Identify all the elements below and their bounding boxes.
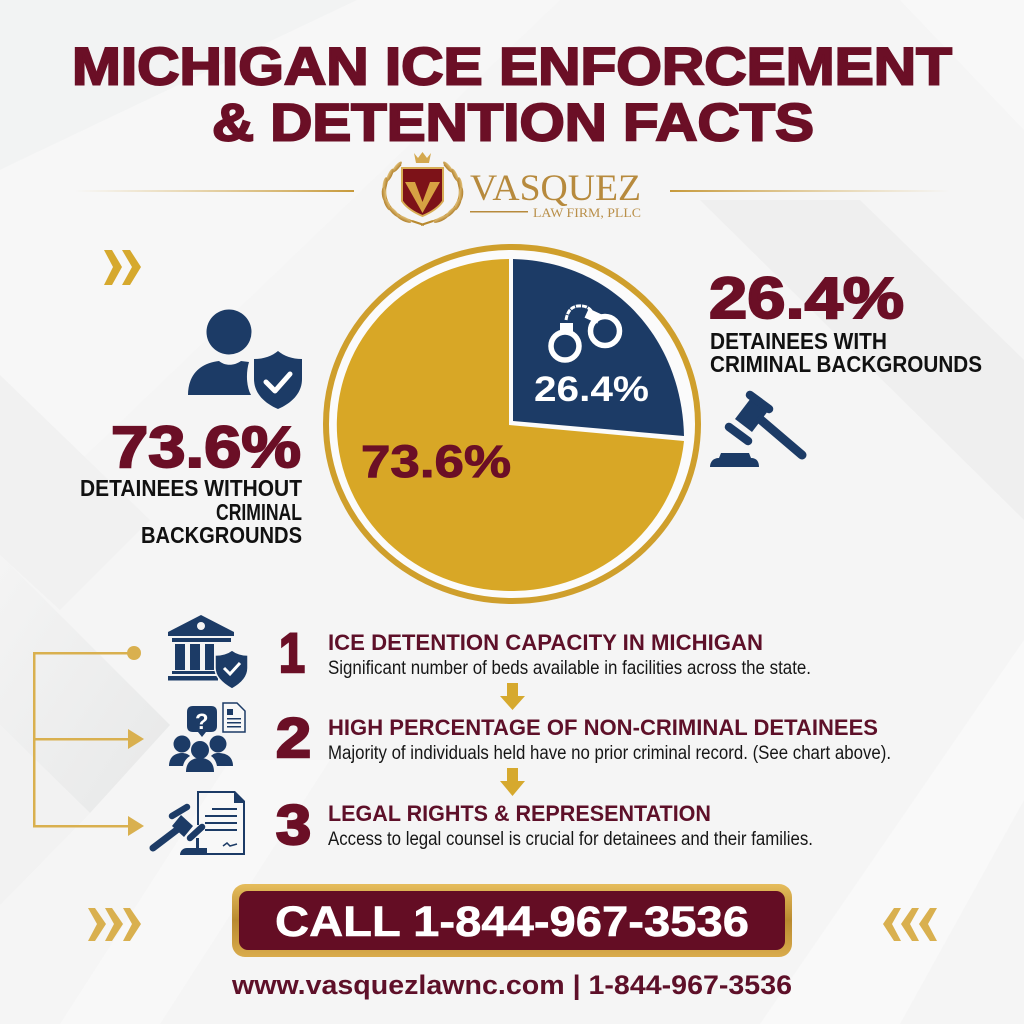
step 2 text: [328, 715, 891, 764]
pie outer ring: [326, 247, 698, 601]
logo: Vasquez Law Firm: LAW FIRM, PLLC: [533, 205, 641, 220]
stat: 73.6% without criminal backgrounds: CRIMINAL: [216, 499, 302, 525]
stat: 26.4% with criminal backgrounds: CRIMINAL BACKGROUNDS: [710, 351, 982, 377]
chevrons bottom left: [88, 908, 141, 941]
pie chart: [326, 247, 698, 601]
chevrons bottom right: [883, 908, 937, 941]
icon: courthouse with shield: [168, 615, 248, 689]
icon: group with question and document: ?: [195, 709, 208, 734]
icon: gavel and document: [153, 791, 245, 855]
step 2 text: Majority of individuals held have no prior criminal record. (See chart above).: [328, 743, 891, 764]
step numbers: 1: [279, 621, 305, 684]
pie slice 73.6%: [337, 259, 684, 591]
arrow: step 2 to 3: [500, 768, 525, 796]
stat: 73.6% without criminal backgrounds: DETAINEES WITHOUT: [80, 475, 302, 501]
stat: 73.6% without criminal backgrounds: BACKGROUNDS: [141, 522, 302, 548]
step 3 text: LEGAL RIGHTS & REPRESENTATION: [328, 801, 711, 826]
logo shield: [402, 168, 443, 216]
step 3 text: Access to legal counsel is crucial for detainees and their families.: [328, 829, 813, 850]
call button: [232, 884, 792, 957]
step numbers: 2: [276, 706, 311, 769]
call button: CALL 1-844-967-3536: [275, 898, 749, 946]
arrow: step 1 to 2: [500, 683, 525, 710]
logo: Vasquez Law Firm: [381, 152, 641, 225]
stat: 26.4% with criminal backgrounds: DETAINEES WITH: [710, 328, 887, 354]
icon: gavel: [710, 395, 802, 467]
logo wordmark: VASQUEZ: [470, 168, 641, 209]
step 1 text: ICE DETENTION CAPACITY IN MICHIGAN: [328, 630, 763, 655]
title: & DETENTION FACTS: [212, 94, 814, 152]
step 1 text: Significant number of beds available in facilities across the state.: [328, 658, 811, 679]
header rule left: [75, 190, 354, 192]
icon: group with question and document: [169, 703, 245, 772]
logo laurel: [381, 160, 464, 225]
pie slice 26.4%: [513, 259, 684, 436]
step 3 text: [328, 801, 813, 850]
connector lines: [33, 646, 144, 836]
title: [72, 38, 952, 152]
stat: 73.6% without criminal backgrounds: 73.6%: [111, 415, 301, 480]
stat: 73.6% without criminal backgrounds: [80, 415, 302, 548]
chevrons top left: [104, 250, 141, 285]
stat: 26.4% with criminal backgrounds: 26.4%: [709, 266, 904, 331]
icon: person with shield: [188, 310, 302, 409]
step numbers: 3: [276, 793, 311, 856]
stat: 26.4% with criminal backgrounds: [709, 266, 982, 377]
logo crown: [414, 152, 431, 163]
step numbers: [276, 621, 311, 856]
website and phone: www.vasquezlawnc.com | 1-844-967-3536: [231, 970, 792, 1000]
step 2 text: HIGH PERCENTAGE OF NON-CRIMINAL DETAINEES: [328, 715, 878, 740]
title: MICHIGAN ICE ENFORCEMENT: [72, 38, 952, 96]
step 1 text: [328, 630, 811, 679]
pie label 73.6%: 73.6%: [361, 436, 511, 487]
icon: handcuffs: [551, 306, 620, 360]
header rule right: [670, 190, 950, 192]
pie label 26.4%: 26.4%: [534, 370, 649, 409]
